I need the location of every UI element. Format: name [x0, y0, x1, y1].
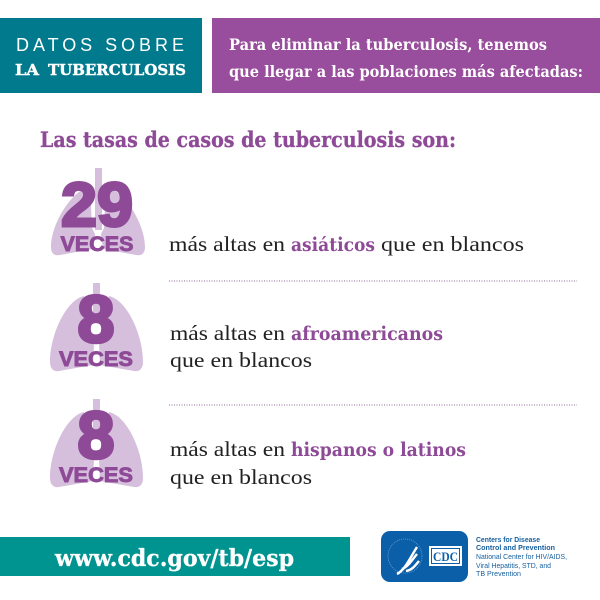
text: asiaticos: más altas en: [169, 232, 286, 256]
heading: datos sobre: DATOS SOBRE: [16, 35, 184, 55]
label veces: VECES: [59, 348, 133, 371]
message line 1: Para eliminar la tuberculosis, tenemos: [229, 35, 547, 54]
text: agency: Viral Hepatitis, STD, and: [476, 561, 551, 570]
text: agency: TB Prevention: [476, 569, 521, 578]
text: afroamericanos: [170, 321, 443, 372]
panel: title: [0, 18, 202, 93]
text: afroamericanos: que en blancos: [170, 348, 312, 372]
text: agency: Control and Prevention: [476, 543, 555, 552]
icon: lungs 8 veces: [50, 282, 143, 371]
panel: message: [212, 18, 600, 93]
label veces: VECES: [59, 464, 133, 487]
text: agency: [476, 535, 567, 578]
text: asiaticos: asiáticos: [291, 234, 375, 256]
text: hispanos o latinos: que en blancos: [170, 465, 312, 489]
text: afroamericanos: más altas en: [170, 321, 286, 345]
url: www.cdc.gov/tb/esp: [54, 545, 294, 572]
heading: la tuberculosis: TUBERCULOSIS: [48, 61, 186, 79]
text: afroamericanos: afroamericanos: [291, 323, 443, 345]
text: asiaticos: que en blancos: [381, 232, 524, 256]
text: agency: National Center for HIV/AIDS,: [476, 552, 567, 561]
text: hispanos o latinos: [170, 437, 466, 489]
number 29: 29: [61, 171, 133, 240]
panel: website: [0, 537, 350, 576]
subheading: Las tasas de casos de tuberculosis son:: [40, 127, 456, 152]
badge CDC: CDC: [433, 549, 458, 564]
divider: [169, 404, 577, 406]
text: agency: Centers for Disease: [476, 535, 540, 544]
text: hispanos o latinos: más altas en: [170, 437, 286, 461]
icon: HHS eagle: [388, 539, 422, 574]
text: asiaticos: [169, 232, 524, 256]
icon: lungs 29 veces: [51, 168, 145, 256]
number 8: 8: [78, 282, 114, 356]
label veces: VECES: [60, 233, 134, 256]
number 8: 8: [78, 398, 114, 472]
icon: lungs 8 veces: [50, 398, 143, 487]
heading: la tuberculosis: LA: [15, 61, 39, 79]
text: hispanos o latinos: hispanos o latinos: [291, 439, 466, 461]
divider: [169, 280, 577, 282]
logo: CDC: [381, 531, 468, 582]
